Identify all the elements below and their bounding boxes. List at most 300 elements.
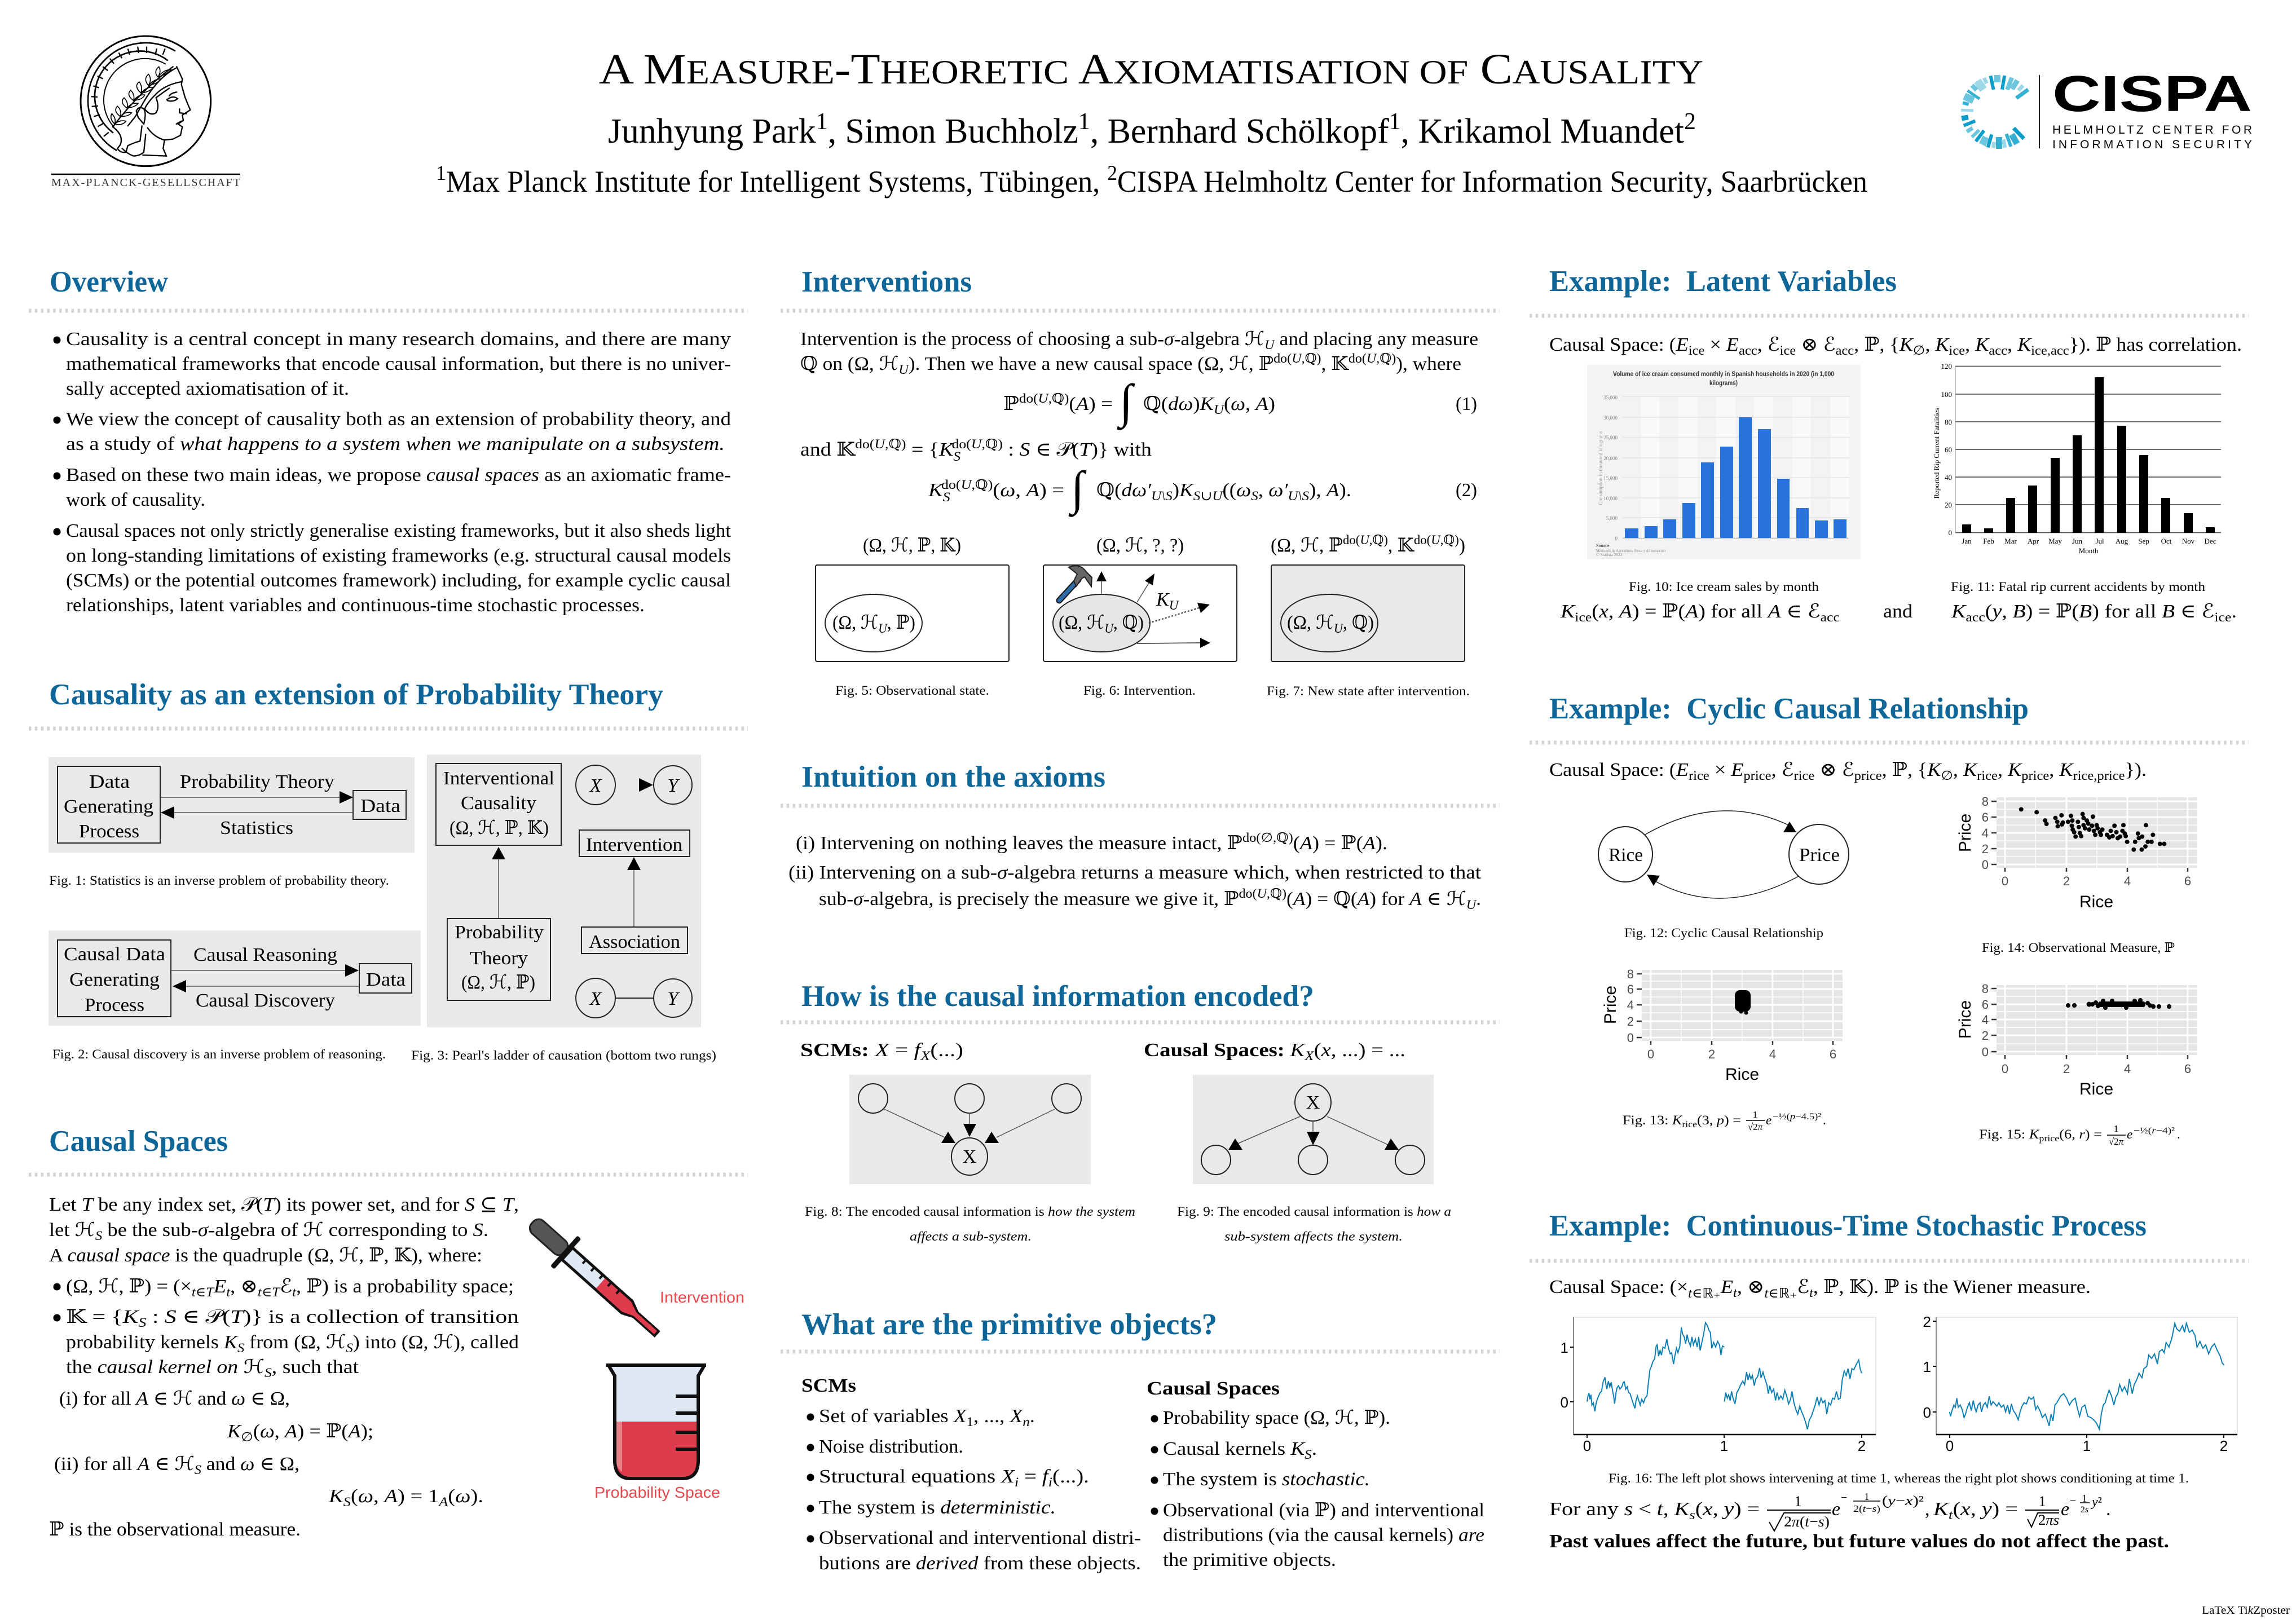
chart: Fig 13 intervention on rice: Price (1601, 986, 1620, 1024)
text block: axioms: . (1476, 889, 1481, 910)
chart: right Brownian plot (conditioning): 1 (1923, 1358, 1931, 1375)
equation 2: ℚ(dω′ (1096, 480, 1149, 501)
text: and K do: = { (906, 439, 939, 460)
diagram: Fig 7 new state: do(U,ℚ) (1414, 533, 1459, 548)
list: Causal Spaces: . (1312, 1438, 1317, 1459)
text block: causal space definition: ∅ (241, 1430, 253, 1445)
bullet list: overview text: (SCMs) or the potential outcomes framework) including, for example cyclic causal (66, 570, 731, 591)
diagram: Fig 6 intervention: U (1169, 598, 1179, 613)
footer: LaTeX TikZposter: LaTeX TikZposter (2202, 1604, 2290, 1617)
caption: Fig 8: Fig. 8: The encoded causal information is how the system (805, 1204, 1135, 1219)
chart: rip current fatalities bar chart: 80 (1945, 418, 1952, 426)
text block: causal space definition: t (226, 1285, 231, 1300)
caption: Fig 13: p) = (1717, 1113, 1739, 1127)
diagram: Fig 2 causal discovery (49, 930, 421, 1026)
caption: Fig 12: Fig. 12: Cyclic Causal Relationship (1624, 926, 1823, 940)
list: SCMs: i (1048, 1475, 1052, 1490)
text block: intervention definition: ). Then we have a new causal space (Ω, ℋ, ℙ (909, 354, 1273, 374)
equation 2: (2) (1456, 480, 1477, 501)
text block: causal space definition: S ∈ 𝒫( T)} is a collection of transition (165, 1307, 468, 1327)
chart: Fig 13 intervention on rice: 8 (1627, 967, 1634, 981)
text block: causal space definition: S (265, 1366, 272, 1380)
diagram: Fig 5 observational state: , ℙ) (887, 612, 915, 633)
formula: K acc: ice (2214, 610, 2231, 625)
chart: Fig 13 intervention on rice: 2 (1627, 1014, 1634, 1029)
chart: left Brownian plot (intervening): 2 (1858, 1437, 1866, 1454)
caption: Fig 14: Fig. 14: Observational Measure, ℙ (1982, 941, 2175, 955)
caption: Fig 15: Fig. 15: K (1979, 1127, 2038, 1141)
equation 1 (1003, 375, 1477, 430)
text: and: and (1883, 601, 1912, 622)
text block: causal space definition: S (346, 1341, 353, 1356)
text block: causal space definition: , such that (272, 1357, 359, 1378)
panel: Causal Spaces (29, 1125, 748, 1540)
list: SCMs: . (1030, 1406, 1035, 1427)
equation 1: ( (1224, 394, 1231, 414)
text block: causal space definition: probability kernels K (66, 1332, 237, 1353)
panel: Example Continuous-Time Stochastic Process (1530, 1210, 2249, 1552)
text block: causal space definition: : (146, 1307, 165, 1327)
text: causal space Wiener: t∈ℝ₊ (1764, 1286, 1797, 1301)
text block: causal space definition: ℙ is the observational measure. (49, 1519, 301, 1540)
diagram: Fig 2 causal discovery: Causal Reasoning (193, 945, 337, 965)
list: SCMs: X (1008, 1406, 1024, 1427)
text: causal space cyclic: price (1854, 769, 1882, 783)
diagram: Fig 6 intervention (1043, 535, 1237, 661)
chart: Fig 15 intervention on price: Price (1956, 1000, 1975, 1039)
text: causal space cyclic: , (2049, 760, 2059, 780)
list: Causal Spaces: distributions (via the causal kernels) are (1163, 1525, 1484, 1546)
text block: axioms (788, 831, 1482, 912)
heading: Overview: Overview (50, 266, 168, 298)
caption: Fig 15: 1 (2114, 1123, 2118, 1134)
chart: Fig 15 intervention on price: 0 (2002, 1062, 2008, 1076)
chart: Fig 13 intervention on rice: 0 (1627, 1031, 1634, 1045)
formula: K acc: . (2231, 601, 2237, 622)
chart: rip current fatalities bar chart: 20 (1945, 501, 1952, 509)
bullet list: overview text: as a study of what happens to a system when we manipulate on a subsystem. (66, 434, 725, 454)
diagram: Fig 1 statistics: Process (79, 821, 139, 842)
bullet list: overview text: Causal spaces not only strictly generalise existing frameworks, but it also sheds light (66, 520, 731, 541)
equation 2: ) (1173, 480, 1179, 501)
chart: rip current fatalities bar chart: 0 (1948, 528, 1952, 537)
subheading: SCMs: (...) (930, 1040, 963, 1061)
text: causal space cyclic: rice (1689, 769, 1709, 783)
text: causal space latent: , ℙ, { (1854, 334, 1900, 355)
chart: Fig 14 observational scatter: 4 (1982, 826, 1989, 840)
text block: intervention definition: U (1264, 338, 1275, 352)
text: causal space latent: , (1965, 334, 1975, 355)
text block: axioms: A) = ℙ(A). (1300, 833, 1387, 854)
text block: causal space definition: t (292, 1285, 297, 1300)
formula: kernels K_s and K_t: s (1689, 1508, 1695, 1522)
subheading: Causal Spaces: ( (1314, 1040, 1321, 1061)
text block: causal space definition: ( (351, 1486, 358, 1507)
diagram: Fig 7 new state: ) (1459, 535, 1465, 556)
bullet list: overview text: sally accepted axiomatisation of it. (66, 378, 349, 399)
logo: CISPA: INFORMATION SECURITY (2052, 138, 2252, 151)
diagram: Fig 8 SCM graph: X (963, 1146, 976, 1167)
subheading: SCMs: SCMs: X = f (800, 1040, 919, 1061)
diagram: Fig 3 Pearl's ladder: Y (668, 775, 680, 796)
diagram: Fig 1 statistics (49, 757, 415, 853)
chart: ice cream sales bar chart: 25,000 (1603, 435, 1618, 440)
chart: right Brownian plot (conditioning): 0 (1923, 1404, 1931, 1421)
formula: K acc: K (1951, 601, 1967, 622)
text: causal space cyclic: ∅ (1941, 769, 1953, 783)
logo: CISPA (1961, 66, 2252, 151)
text: causal space cyclic: }). (2125, 760, 2147, 780)
chart: rip current fatalities bar chart: 40 (1945, 473, 1952, 482)
heading: Intuition on the axioms: Intuition on the axioms (801, 761, 1105, 793)
diagram: Fig 3 Pearl's ladder: Interventional (443, 768, 554, 789)
caption: Fig 1: Fig. 1: Statistics is an inverse problem of probability theory. (49, 873, 389, 888)
chart: Fig 13 intervention on rice (1601, 967, 1843, 1084)
text block: causal space definition: (Ω, ℋ, ℙ) = (× (66, 1276, 183, 1297)
text: causal space latent: , (2007, 334, 2017, 355)
formula: K ice: ( (1592, 601, 1599, 622)
diagram: Fig 9 causal space graph (1193, 1075, 1434, 1184)
chart: right Brownian plot (conditioning): 2 (1923, 1313, 1931, 1330)
formula: kernels K_s and K_t: 2s (2081, 1505, 2088, 1515)
bullet list: overview text: Causality is a central concept in many research domains, and there are many (66, 329, 731, 350)
equation 2: S (943, 490, 950, 505)
logo: CISPA: CISPA (2052, 66, 2252, 122)
caption: Fig 13: −½( p−4.5)² (1773, 1112, 1821, 1122)
chart: left Brownian plot (intervening): 0 (1583, 1437, 1591, 1454)
text block: causal space definition: S (237, 1341, 245, 1356)
chart: Fig 13 intervention on rice: 4 (1627, 998, 1634, 1012)
text: causal space latent: ice,acc (2031, 343, 2069, 358)
caption: Fig 3: Fig. 3: Pearl's ladder of causation (bottom two rungs) (411, 1048, 716, 1062)
caption: Fig 15: (6, (2059, 1127, 2079, 1141)
chart: rip current fatalities bar chart: 60 (1945, 445, 1952, 454)
text: causal space latent: , (1925, 334, 1935, 355)
equation 2: S (1251, 489, 1258, 504)
text: causal space latent: K (1975, 334, 1990, 355)
diagram: Fig 7 new state: , 𝕂 (1388, 535, 1414, 556)
chart: left Brownian plot (intervening): 0 (1561, 1394, 1568, 1411)
heading: Example Cyclic: Example: Cyclic Causal Relationship (1549, 692, 2029, 725)
chart: right Brownian plot (conditioning): 2 (2220, 1437, 2228, 1454)
bullet list: overview text: work of causality. (66, 489, 205, 510)
chart: rip current fatalities bar chart: Aug (2116, 537, 2128, 545)
text: causal space latent: ∅ (1913, 343, 1925, 358)
text: causal space latent: ice (1689, 343, 1704, 358)
equation 2: U\S (1151, 489, 1173, 504)
chart: right Brownian plot (conditioning): 1 (2083, 1437, 2091, 1454)
text block: intervention definition (800, 329, 1478, 377)
caption: Fig 13: (3, (1697, 1113, 1717, 1127)
subheading: SCMs: X (920, 1049, 931, 1063)
formula: kernels K_s and K_t: . (2106, 1499, 2110, 1520)
formula: kernels K_s and K_t: 1 (1865, 1491, 1869, 1502)
list: SCMs: The system is deterministic. (819, 1497, 1056, 1518)
panel: Interventions (781, 266, 1500, 698)
equation 2: , (1258, 480, 1268, 501)
caption: Fig 15: √2π (2109, 1136, 2124, 1147)
formula: K acc: ( (1985, 601, 1992, 622)
equation 2: S∪U (1193, 489, 1223, 504)
text block: causal space definition: S (343, 1495, 351, 1510)
chart: Fig 13 intervention on rice: 6 (1627, 982, 1634, 996)
diagram: Fig 12 cyclic graph (1598, 811, 1849, 898)
subheading: Causal Spaces: Causal Spaces: K (1144, 1040, 1303, 1061)
panel: Example Latent Variables (1530, 265, 2249, 625)
diagram: Fig 6 intervention: K (1156, 589, 1169, 610)
chart: left Brownian plot (intervening): 1 (1561, 1339, 1568, 1356)
icon: beaker: Probability Space (594, 1484, 720, 1501)
text: and K do: and 𝕂 (800, 439, 849, 460)
caption: Fig 15: −½( r−4)² (2134, 1126, 2175, 1136)
equation 2: ( (993, 480, 1000, 501)
chart: Fig 14 observational scatter: 0 (2002, 874, 2008, 888)
authors: 1 (1389, 108, 1401, 135)
equation 1: U (1214, 403, 1224, 417)
diagram: Fig 5 observational state: (Ω, ℋ (832, 612, 882, 633)
diagram: Fig 2 causal discovery: Causal Discovery (196, 990, 335, 1011)
list: SCMs: Structural equations X (819, 1466, 1013, 1487)
text: conclusion: Past values affect the future, but future values do not affect the past. (1549, 1531, 2169, 1552)
text: causal space latent: E (1726, 334, 1739, 355)
list: SCMs: SCMs (801, 1375, 856, 1396)
text block: causal space definition: , ⊗ (230, 1276, 258, 1297)
panel: Intuition on the axioms (781, 761, 1500, 912)
chart: Fig 13 intervention on rice: 2 (1708, 1047, 1715, 1061)
title: A M EASURE -THEORETIC AXIOMATISATION OF CAUSALITY (599, 46, 1703, 93)
chart: ice cream sales bar chart: 20,000 (1603, 456, 1618, 461)
chart: Fig 14 observational scatter (1956, 795, 2197, 911)
authors: , Simon Buchholz (828, 112, 1078, 151)
chart: ice cream sales bar chart: 10,000 (1603, 496, 1618, 501)
text: causal space latent: }). ℙ has correlation. (2069, 334, 2242, 355)
chart: Fig 14 observational scatter: 2 (2063, 874, 2070, 888)
text: causal space latent: × (1704, 334, 1726, 355)
panel: What are the primitive objects? (781, 1308, 1500, 1574)
diagram: Fig 12 cyclic graph: Rice (1608, 845, 1643, 866)
chart: Fig 15 intervention on price: 6 (2184, 1062, 2191, 1076)
equation 2: ω, A) = (1000, 480, 1061, 501)
text block: causal space definition: ω, A) = 1 (358, 1486, 434, 1507)
text block: causal space definition: ω, A) = ℙ(A); (260, 1421, 373, 1442)
chart: Fig 14 observational scatter: Rice (2079, 893, 2113, 911)
text: causal space Wiener: Causal Space: (× (1549, 1277, 1680, 1298)
text block: axioms: ( (1286, 889, 1293, 910)
text block: causal space definition: A causal space is the quadruple (Ω, ℋ, ℙ, 𝕂), where: (49, 1245, 482, 1266)
heading: How is the causal information encoded: How is the causal information encoded? (801, 980, 1314, 1013)
chart: rip current fatalities bar chart: 120 (1941, 362, 1952, 370)
text block: intervention definition: U (898, 363, 909, 377)
text: causal space cyclic: , (1998, 760, 2008, 780)
chart: ice cream sales bar chart: 0 (1615, 536, 1618, 541)
formula: kernels K_s and K_t: x, y) = (1703, 1499, 1756, 1520)
list: Causal Spaces: S (1305, 1448, 1312, 1462)
diagram: Fig 1 statistics: Generating (64, 796, 153, 817)
text block: causal space definition: S (95, 1229, 103, 1243)
formula: kernels K_s and K_t: e (2061, 1499, 2069, 1520)
diagram: Fig 3 Pearl's ladder: X (589, 775, 602, 796)
caption: Fig 15 (1979, 1123, 2180, 1147)
logo: Max Planck Gesellschaft (51, 36, 240, 189)
text: causal space cyclic: K (1927, 760, 1942, 780)
diagram: Fig 3 Pearl's ladder: (Ω, ℋ, ℙ, 𝕂) (449, 818, 549, 839)
diagram: Fig 2 causal discovery: Process (85, 995, 144, 1016)
equation 2: ω (1236, 480, 1251, 501)
formula: kernels K_s and K_t: For any s < t, K (1549, 1499, 1687, 1520)
chart: ice cream sales bar chart: 15,000 (1603, 475, 1618, 481)
list: SCMs: Set of variables X (819, 1406, 966, 1427)
text block: causal space definition: ℰ (280, 1276, 292, 1297)
authors: 1 (816, 108, 828, 135)
chart: ice cream sales bar chart: 30,000 (1603, 415, 1618, 421)
text block: causal space definition: let ℋ (49, 1220, 92, 1241)
chart: rip current fatalities bar chart (1932, 362, 2221, 555)
text: causal space Wiener: , ℙ, 𝕂). ℙ is the Wiener measure. (1813, 1277, 2091, 1298)
text: causal space cyclic: × (1709, 760, 1731, 780)
chart: Fig 15 intervention on price: 4 (1982, 1013, 1989, 1027)
bullet list: overview text (53, 329, 731, 616)
caption: Fig 8 (805, 1204, 1135, 1243)
text block: intervention definition: ), where (1396, 354, 1461, 374)
text block: causal space definition: K (227, 1421, 243, 1442)
chart: Fig 15 intervention on price: Rice (2079, 1080, 2113, 1098)
formula: kernels K_s and K_t: ( (1953, 1499, 1960, 1520)
chart: ice cream sales bar chart: 35,000 (1603, 395, 1618, 400)
chart: Fig 15 intervention on price: 8 (1982, 982, 1989, 996)
text block: causal space definition: S (138, 1316, 147, 1330)
text: and K do: : (1003, 439, 1019, 460)
text block: causal space definition: and (201, 1454, 240, 1475)
diagram: Fig 3 Pearl's ladder: Y (668, 988, 680, 1009)
subheading: Causal Spaces: X (1304, 1049, 1315, 1063)
caption: Fig 13: 1 (1753, 1109, 1757, 1120)
text: and K do: do(U,ℚ) (952, 437, 1001, 452)
caption: Fig 13: e (1766, 1113, 1771, 1127)
caption: Fig 13: rice (1682, 1120, 1697, 1129)
text: causal space cyclic: K (1963, 760, 1978, 780)
heading: Example Latent Variables: Example: Latent Variables (1549, 265, 1897, 298)
chart: rip current fatalities bar chart: Jun (2072, 537, 2083, 545)
text block: causal space definition: ( (253, 1421, 260, 1442)
list: SCMs: Observational and interventional distri- (819, 1528, 1141, 1548)
equation 2: ∫ (1068, 462, 1087, 517)
text: causal space latent: K (1934, 334, 1950, 355)
text block: intervention definition: , 𝕂 (1321, 354, 1349, 374)
list: SCMs: (...). (1052, 1466, 1089, 1487)
diagram: Fig 3 Pearl's ladder: Theory (470, 948, 528, 969)
formula: kernels K_s and K_t: , (1925, 1499, 1930, 1520)
text block: axioms: A) = ℚ(A) for A ∈ ℋ (1293, 889, 1465, 910)
text block: causal space definition: be the sub- (102, 1220, 198, 1241)
text: causal space cyclic: , ℰ (1771, 760, 1793, 780)
equation 2: (( (1223, 480, 1236, 501)
diagram: Fig 2 causal discovery: Data (366, 969, 406, 990)
chart: rip current fatalities bar chart: Jan (1962, 537, 1972, 545)
formula: K ice: x, A) = ℙ( A) for all A ∈ ℰ (1599, 601, 1816, 622)
equation 1: ω, A) (1231, 394, 1275, 414)
heading: Causal Spaces: Causal Spaces (49, 1125, 228, 1158)
diagram: Fig 3 Pearl's ladder: Intervention (586, 835, 682, 855)
chart: rip current fatalities bar chart: Mar (2004, 537, 2017, 545)
diagram: Fig 5 observational state: (Ω, ℋ, ℙ, 𝕂) (863, 535, 961, 556)
diagram: Fig 9 causal space graph: X (1306, 1092, 1320, 1113)
text block: intervention definition: Intervention is the process of choosing a sub- σ-algebra ℋ (800, 329, 1261, 350)
chart: Fig 15 intervention on price: 4 (2124, 1062, 2131, 1076)
text: causal space cyclic: K (2007, 760, 2023, 780)
chart: Fig 13 intervention on rice: 4 (1769, 1047, 1776, 1061)
caption: Fig 13: √2π (1748, 1122, 1763, 1132)
text block: causal space definition: ω ∈ Ω, (240, 1454, 297, 1475)
text block: causal space definition: the causal kernel on ℋ (66, 1357, 262, 1378)
caption: Fig 13: Fig. 13: K (1623, 1113, 1681, 1127)
chart: Fig 15 intervention on price: 2 (1982, 1029, 1989, 1043)
list: SCMs: , ..., (973, 1406, 1010, 1427)
equation 1: ∫ (1117, 375, 1135, 430)
equation 1: A) = (1076, 394, 1110, 414)
chart: Fig 14 observational scatter: Price (1956, 814, 1975, 852)
chart: Fig 14 observational scatter: 2 (1982, 842, 1989, 856)
text block: causal space definition: Let T be any index set, 𝒫( T) its power set, and for S ⊆ T, (49, 1194, 519, 1215)
caption: Fig 2: Fig. 2: Causal discovery is an inverse problem of reasoning. (52, 1047, 386, 1061)
chart: Fig 14 observational scatter: 8 (1982, 795, 1989, 809)
list: SCMs: = (1019, 1466, 1042, 1487)
caption: Fig 10: Fig. 10: Ice cream sales by month (1629, 580, 1819, 594)
formula: kernels K_s and K_t: 1 (2082, 1493, 2087, 1504)
list: Causal Spaces: the primitive objects. (1163, 1550, 1336, 1570)
text block: axioms: do(∅,ℚ) (1242, 831, 1293, 845)
chart: rip current fatalities bar chart: May (2048, 537, 2062, 545)
chart: Fig 14 observational scatter: 6 (1982, 810, 1989, 824)
text block: causal space definition: from (Ω, ℋ (244, 1332, 346, 1353)
text: causal space cyclic: price (2021, 769, 2049, 783)
equation 1: (1) (1456, 394, 1477, 414)
diagram: Fig 1 statistics: Data (360, 796, 400, 817)
equation 1: ℚ(dω)K (1143, 394, 1213, 414)
caption: Fig 15: e (2127, 1127, 2132, 1141)
caption: Fig 15: . (2177, 1127, 2180, 1141)
chart: rip current fatalities bar chart: 100 (1941, 390, 1952, 399)
equation 1: ℙ (1003, 394, 1018, 414)
chart: ice cream sales bar chart: 5,000 (1606, 515, 1618, 521)
bullet list: overview text: We view the concept of causality both as an extension of probability theory, and (66, 409, 731, 430)
equation 2: K (928, 480, 944, 501)
formula: kernels K_s and K_t: t (1949, 1508, 1953, 1522)
logo: CISPA: HELMHOLTZ CENTER FOR (2052, 123, 2252, 136)
caption: Fig 15: price (2039, 1134, 2059, 1144)
formula: K ice: ice (1575, 610, 1592, 625)
text: causal space latent: acc (1835, 343, 1854, 358)
caption: Fig 9: Fig. 9: The encoded causal information is how a (1177, 1204, 1451, 1219)
text block: intervention definition: ℚ on (Ω, ℋ (800, 354, 895, 374)
chart: Fig 14 observational scatter: 4 (2124, 874, 2131, 888)
caption: Fig 16: Fig. 16: The left plot shows intervening at time 1, whereas the right plot shows conditioning at time 1. (1608, 1471, 2189, 1485)
diagram: Fig 5 observational state (816, 535, 1009, 661)
formula: kernels K_s and K_t: 1 (1795, 1493, 1801, 1510)
diagram: Fig 3 Pearl's ladder: X (589, 988, 602, 1009)
list: SCMs: Noise distribution. (819, 1436, 963, 1457)
diagram: Fig 3 Pearl's ladder: (Ω, ℋ, ℙ) (461, 972, 535, 993)
text: causal space Wiener: t (1809, 1286, 1814, 1300)
authors: , Krikamol Muandet (1401, 112, 1684, 151)
diagram: Fig 3 Pearl's ladder (427, 754, 701, 1027)
text: causal space latent: ice (1780, 343, 1796, 358)
heading: Example Continuous-Time: Example: Continuous-Time Stochastic Process (1549, 1210, 2147, 1242)
chart: ice cream sales bar chart: kilograms) (1709, 380, 1738, 387)
chart: Fig 15 intervention on price: 6 (1982, 998, 1989, 1012)
text: causal space Wiener: t (1733, 1286, 1737, 1300)
diagram: Fig 12 cyclic graph: Price (1799, 845, 1840, 866)
diagram: Fig 3 Pearl's ladder: Causality (461, 793, 536, 814)
